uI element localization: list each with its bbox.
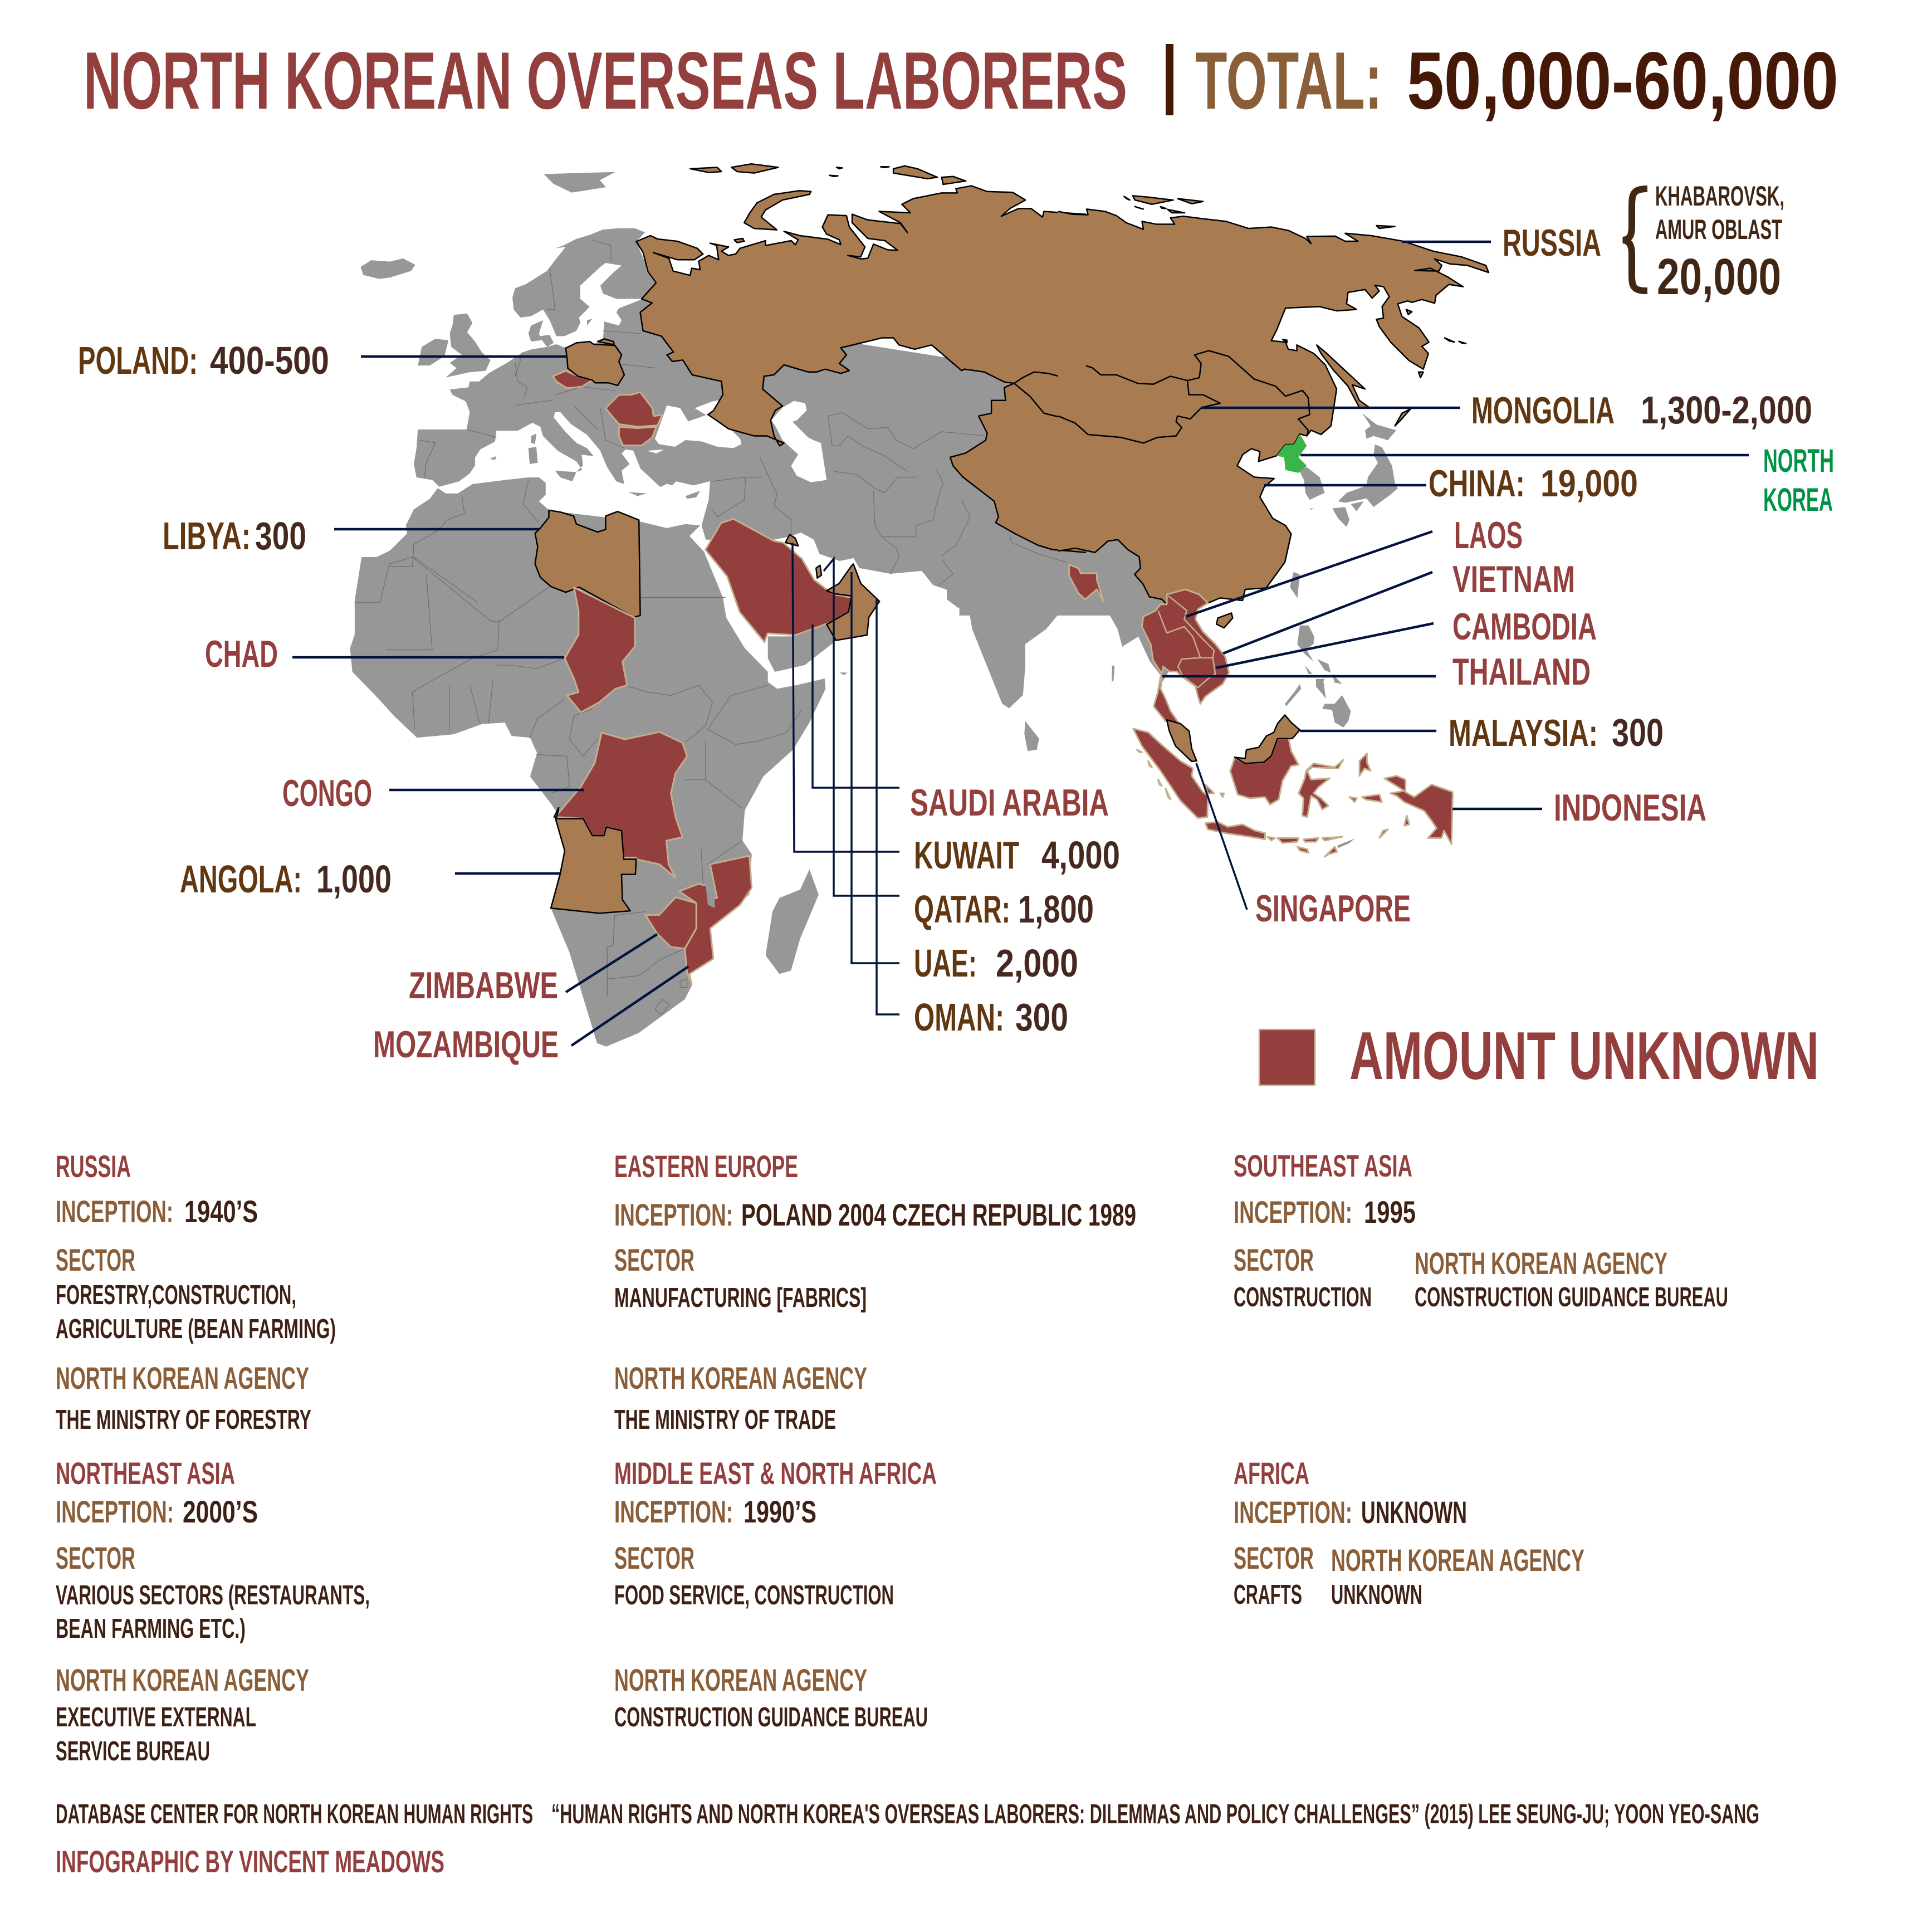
map labels	[78, 180, 1834, 1066]
heading: EASTERN EUROPE	[614, 1149, 798, 1184]
sector value two: AGRICULTURE (BEAN FARMING)	[56, 1314, 336, 1344]
map: svalbard	[544, 172, 615, 193]
label: singapore: SINGAPORE	[1255, 887, 1411, 930]
sector value: MANUFACTURING [FABRICS]	[614, 1283, 867, 1313]
sector: SECTOR	[614, 1242, 694, 1277]
heading: RUSSIA	[56, 1149, 131, 1184]
agency value: CONSTRUCTION GUIDANCE BUREAU	[614, 1702, 928, 1732]
inception: INCEPTION:	[1234, 1194, 1352, 1229]
inception: INCEPTION:	[614, 1494, 733, 1529]
sector value one: VARIOUS SECTORS (RESTAURANTS,	[56, 1580, 370, 1610]
map: inland seas and european borders	[390, 240, 741, 603]
map: russia and china west	[636, 186, 1086, 553]
sector value: FOOD SERVICE, CONSTRUCTION	[614, 1580, 894, 1610]
sector: SECTOR	[1234, 1242, 1314, 1277]
title: main heading: NORTH KOREAN OVERSEAS LABORERS	[84, 35, 1127, 126]
inception value: 1995	[1364, 1194, 1416, 1229]
label: poland: POLAND:	[78, 339, 198, 382]
value: uae: 2,000	[996, 941, 1078, 985]
agency: NORTH KOREAN AGENCY	[56, 1662, 309, 1697]
label: thailand: THAILAND	[1452, 651, 1591, 693]
inception value: UNKNOWN	[1361, 1495, 1467, 1530]
panel: middle east and north africa	[614, 1456, 937, 1732]
map: africa highlighted countries	[551, 588, 752, 984]
inception: INCEPTION:	[1234, 1495, 1352, 1530]
label: indonesia: INDONESIA	[1554, 787, 1706, 829]
map: gray land europe and north africa	[355, 228, 741, 648]
map: southeast asia highlighted countries	[1133, 589, 1452, 857]
inception: INCEPTION:	[614, 1197, 733, 1232]
panel: africa	[1234, 1456, 1584, 1610]
value: qatar: 1,800	[1018, 887, 1094, 931]
sector: SECTOR	[614, 1540, 694, 1575]
panel: northeast asia	[56, 1456, 370, 1766]
map: africa south	[350, 557, 847, 1047]
map: philippines and pacific islands	[1112, 572, 1354, 848]
panel: eastern europe	[614, 1149, 1136, 1435]
panel: russia	[56, 1149, 336, 1435]
agency: NORTH KOREAN AGENCY	[614, 1360, 867, 1395]
legend swatch	[1259, 1029, 1315, 1085]
map: japan and south korea	[1298, 413, 1398, 527]
heading: SOUTHEAST ASIA	[1234, 1148, 1412, 1183]
label: libya: LIBYA:	[163, 514, 251, 558]
map: caspian sea and central asian borders	[636, 164, 1086, 585]
value: kuwait: 4,000	[1041, 833, 1120, 877]
map: india and islands	[947, 507, 1177, 751]
agency: NORTH KOREAN AGENCY	[614, 1662, 867, 1697]
agency: NORTH KOREAN AGENCY	[1331, 1543, 1584, 1578]
agency: NORTH KOREAN AGENCY	[56, 1360, 309, 1395]
map: arabian peninsula highlighted countries	[706, 519, 879, 642]
label: north korea line one: NORTH	[1763, 443, 1834, 479]
title	[84, 35, 1838, 126]
label: uae: UAE:	[914, 941, 977, 985]
label: mozambique: MOZAMBIQUE	[373, 1023, 559, 1066]
label: zimbabwe: ZIMBABWE	[409, 964, 558, 1007]
agency value one: EXECUTIVE EXTERNAL	[56, 1702, 256, 1732]
label: north korea line two: KOREA	[1763, 482, 1833, 518]
heading: NORTHEAST ASIA	[56, 1456, 235, 1491]
value: angola: 1,000	[316, 857, 392, 901]
sector: SECTOR	[56, 1242, 135, 1277]
label: oman: OMAN:	[914, 995, 1004, 1039]
heading: MIDDLE EAST & NORTH AFRICA	[614, 1456, 937, 1491]
sector value two: BEAN FARMING ETC.)	[56, 1614, 246, 1644]
inception value: 1940’S	[184, 1194, 258, 1229]
title: separator bar	[1166, 44, 1173, 115]
agency value: THE MINISTRY OF TRADE	[614, 1405, 836, 1435]
world map	[350, 164, 1489, 1047]
inception: INCEPTION:	[56, 1494, 174, 1529]
label: khabarovsk: KHABAROVSK,	[1655, 180, 1784, 212]
icon: brace	[1623, 189, 1647, 291]
value: malaysia: 300	[1612, 711, 1664, 754]
map: north korea	[1276, 434, 1307, 473]
title: total number: 50,000-60,000	[1407, 35, 1838, 126]
legend	[1259, 1018, 1819, 1094]
sector: SECTOR	[1234, 1540, 1314, 1575]
value: poland: 400-500	[210, 339, 329, 382]
sector: SECTOR	[56, 1540, 135, 1575]
sector value one: FORESTRY,CONSTRUCTION,	[56, 1280, 296, 1310]
agency: NORTH KOREAN AGENCY	[1415, 1246, 1667, 1281]
value: oman: 300	[1015, 995, 1068, 1039]
source one: DATABASE CENTER FOR NORTH KOREAN HUMAN RIGHTS	[56, 1799, 533, 1829]
agency value: THE MINISTRY OF FORESTRY	[56, 1405, 311, 1435]
inception: INCEPTION:	[56, 1194, 173, 1229]
label: laos: LAOS	[1454, 514, 1523, 557]
heading: AFRICA	[1234, 1456, 1309, 1491]
label: congo: CONGO	[282, 772, 372, 814]
label: russia: RUSSIA	[1503, 222, 1601, 264]
label: amur oblast: AMUR OBLAST	[1655, 214, 1782, 245]
label: qatar: QATAR:	[914, 887, 1010, 931]
agency value: CONSTRUCTION GUIDANCE BUREAU	[1415, 1282, 1728, 1312]
credit: INFOGRAPHIC BY VINCENT MEADOWS	[56, 1844, 444, 1879]
label: mongolia: MONGOLIA	[1471, 389, 1615, 432]
label: malaysia: MALAYSIA:	[1449, 712, 1598, 754]
map: europe highlighted countries	[535, 339, 662, 617]
label: chad: CHAD	[205, 633, 278, 675]
leader lines	[292, 242, 1749, 1046]
inception value: 1990’S	[744, 1494, 816, 1529]
panel: southeast asia	[1234, 1148, 1728, 1312]
map: russia east, china east and mongolia	[1058, 196, 1489, 604]
sources	[56, 1799, 1759, 1829]
map: gray land south asia and japan	[960, 356, 1163, 616]
map: bangladesh	[1069, 564, 1104, 602]
label: vietnam: VIETNAM	[1452, 558, 1575, 601]
label: china: CHINA:	[1429, 462, 1525, 505]
value: mongolia: 1,300-2,000	[1641, 388, 1812, 432]
inception value: POLAND 2004 CZECH REPUBLIC 1989	[741, 1197, 1136, 1232]
map: gray land middle east and central asia	[629, 341, 1086, 602]
agency value two: SERVICE BUREAU	[56, 1736, 210, 1766]
value: libya: 300	[255, 514, 306, 558]
label: saudi arabia: SAUDI ARABIA	[910, 782, 1109, 824]
title: total label: TOTAL:	[1195, 35, 1382, 126]
sector value: CONSTRUCTION	[1234, 1282, 1372, 1312]
value: russia: 20,000	[1657, 248, 1781, 305]
inception value: 2000’S	[183, 1494, 258, 1529]
label: cambodia: CAMBODIA	[1452, 606, 1597, 648]
label: angola: ANGOLA:	[180, 857, 302, 901]
agency value: UNKNOWN	[1331, 1580, 1422, 1610]
sector value: CRAFTS	[1234, 1580, 1302, 1610]
value: china: 19,000	[1540, 462, 1638, 505]
label: kuwait: KUWAIT	[914, 833, 1019, 877]
